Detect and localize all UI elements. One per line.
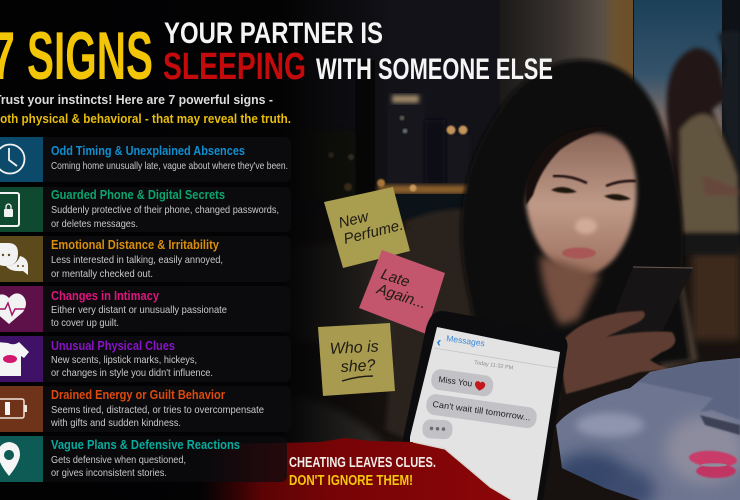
window with dusk sky bbox=[634, 0, 724, 250]
bubble: Miss You: Miss You bbox=[438, 374, 473, 389]
sign 6: drained energy: with gifts and sudden kindness. bbox=[50, 417, 181, 429]
sign 7: vague plans bbox=[0, 436, 287, 482]
lamp glow and sofa on the right bbox=[692, 245, 740, 340]
woman looking at a phone bbox=[385, 60, 698, 440]
sign 4: changes in intimacy: Either very distant or unusually passionate bbox=[51, 304, 227, 316]
bubble: Can't wait till tomorrow bbox=[425, 393, 538, 429]
sweater bbox=[385, 209, 560, 440]
sign 6: drained energy bbox=[0, 386, 291, 432]
back arrow: ‹ bbox=[436, 333, 443, 350]
bubble: Miss You bbox=[430, 368, 494, 397]
title bbox=[0, 17, 553, 94]
sign 4: changes in intimacy: to cover up guilt. bbox=[51, 317, 119, 329]
sticky note: Who is she bbox=[318, 323, 395, 396]
sticky note: New Perfume: New bbox=[337, 208, 371, 232]
sign 5: physical clues: or changes in style you didn't influence. bbox=[51, 367, 213, 379]
banner line 1: CHEATING LEAVES CLUES. bbox=[289, 455, 436, 471]
icon: speech bubbles bbox=[0, 243, 28, 275]
sign 7: vague plans: Vague Plans & Defensive Reactions bbox=[51, 438, 240, 452]
bubble: Can't wait till tomorrow: Can't wait till tomorrow... bbox=[432, 399, 531, 422]
sign 6: drained energy: Seems tired, distracted, or tries to overcompensate bbox=[51, 404, 264, 416]
icon: clock bbox=[0, 144, 24, 174]
sign 3: emotional distance: or mentally checked out. bbox=[51, 268, 153, 280]
sign 2: guarded phone bbox=[0, 187, 291, 232]
sticky note: Late Again bbox=[359, 250, 445, 334]
sign 4: changes in intimacy: Changes in Intimacy bbox=[51, 289, 159, 303]
sticky note: Late Again: Again... bbox=[374, 280, 428, 313]
sweater sleeve on the right bbox=[660, 250, 698, 370]
sticky note: Who is she: she? bbox=[340, 357, 376, 376]
sign 2: guarded phone: or deletes messages. bbox=[51, 218, 138, 230]
bubble: typing indicator bbox=[422, 419, 453, 440]
intro line 2: both physical & behavioral - that may reveal the truth. bbox=[0, 112, 291, 126]
shirt with lipstick mark bbox=[550, 355, 740, 500]
nose bbox=[575, 218, 597, 234]
couple in the background bbox=[667, 31, 740, 255]
icon: phone with lock bbox=[0, 193, 19, 226]
eyebrows bbox=[553, 176, 636, 186]
sticky note: New Perfume: Perfume... bbox=[342, 215, 413, 248]
torn red banner bbox=[200, 438, 512, 500]
sign 7: vague plans: Gets defensive when questioned, bbox=[51, 454, 186, 466]
hair strand over the forehead bbox=[526, 127, 610, 205]
sign 5: physical clues: Unusual Physical Clues bbox=[51, 339, 175, 353]
title: sleeping: SLEEPING bbox=[163, 46, 306, 88]
sign 5: physical clues bbox=[0, 336, 291, 382]
neck bbox=[540, 255, 600, 325]
hair bbox=[461, 60, 690, 370]
eyes bbox=[551, 187, 631, 200]
collar bbox=[630, 358, 740, 420]
lipstick kiss mark bbox=[689, 449, 737, 478]
sign 3: emotional distance: Less interested in talking, easily annoyed, bbox=[51, 254, 223, 266]
sign 1: odd timing: Coming home unusually late, vague about where they've been. bbox=[51, 160, 288, 172]
icon: heart with pulse bbox=[0, 293, 26, 324]
intro line 1: Trust your instincts! Here are 7 powerful signs - bbox=[0, 93, 273, 107]
title: your partner is: YOUR PARTNER IS bbox=[164, 17, 383, 50]
black smartphone held by the woman bbox=[563, 267, 693, 394]
title: signs: SIGNS bbox=[27, 18, 153, 94]
sticky note: New Perfume bbox=[324, 187, 413, 268]
timestamp: Today 11:32 PM bbox=[474, 360, 514, 372]
sign 2: guarded phone: Suddenly protective of their phone, changed passwords, bbox=[51, 204, 279, 216]
face bbox=[526, 133, 637, 277]
sign 3: emotional distance: Emotional Distance & Irritability bbox=[51, 238, 219, 252]
sign 7: vague plans: or gives inconsistent stories. bbox=[51, 467, 167, 479]
hand holding the phone bbox=[563, 311, 684, 394]
lips bbox=[562, 248, 596, 258]
icon: location pin bbox=[0, 442, 20, 476]
title: with someone else: WITH SOMEONE ELSE bbox=[316, 53, 553, 86]
icon: t-shirt with lipstick bbox=[0, 342, 29, 376]
foreground phone with text messages bbox=[402, 311, 568, 500]
sign 6: drained energy: Drained Energy or Guilt Behavior bbox=[51, 388, 225, 402]
sticky note: Late Again: Late bbox=[379, 266, 412, 291]
curtain bbox=[497, 0, 633, 250]
icon: low battery bbox=[0, 399, 27, 418]
banner line 2: DON'T IGNORE THEM! bbox=[289, 473, 413, 489]
messages label: Messages bbox=[446, 333, 485, 348]
sign 1: odd timing bbox=[0, 137, 291, 182]
messages header bbox=[434, 348, 557, 368]
dark window frame bbox=[722, 0, 740, 250]
sign 5: physical clues: New scents, lipstick marks, hickeys, bbox=[51, 354, 197, 366]
sign 3: emotional distance bbox=[0, 236, 291, 282]
sign 2: guarded phone: Guarded Phone & Digital Secrets bbox=[51, 188, 225, 202]
city view through the window bbox=[300, 0, 500, 219]
sign 1: odd timing: Odd Timing & Unexplained Absences bbox=[51, 144, 245, 158]
left dark overlay behind the text bbox=[0, 0, 560, 500]
sign 4: changes in intimacy bbox=[0, 286, 291, 332]
sticky note: Who is she: Who is bbox=[329, 338, 379, 358]
screen bbox=[410, 327, 560, 500]
bed and headboard on the left of the woman bbox=[280, 242, 430, 360]
